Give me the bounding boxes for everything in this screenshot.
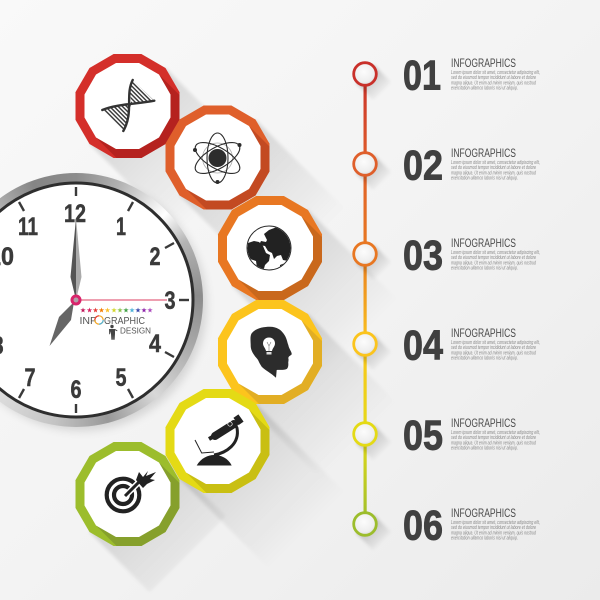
rainbow stars: ★	[80, 306, 86, 314]
body text: magna aliqua. Ut enim ad minim veniam, quis nostrud	[451, 260, 536, 266]
body text: Lorem ipsum dolor sit amet, consectetur adipiscing elit,	[451, 430, 540, 436]
badge 1: DNA	[76, 54, 180, 158]
timeline node 6	[354, 513, 391, 550]
timeline node 1	[354, 63, 391, 100]
number: 01	[403, 52, 441, 98]
step 02	[403, 142, 540, 188]
clock centre	[70, 294, 82, 306]
step 05	[403, 412, 540, 458]
number: 02	[403, 142, 443, 188]
step 06	[403, 502, 540, 548]
logo word: INF	[80, 316, 96, 327]
timeline node 4	[354, 333, 391, 370]
icon: head with light bulb	[250, 327, 292, 378]
logo person	[109, 325, 118, 340]
long shadows of the badges	[90, 68, 405, 592]
body text: sed do eiusmod tempor incididunt ut labore et dolore	[451, 435, 536, 441]
number: 03	[403, 232, 443, 278]
number: 06	[403, 502, 443, 548]
rainbow stars: ★	[92, 306, 99, 314]
body text: magna aliqua. Ut enim ad minim veniam, quis nostrud	[451, 170, 536, 176]
logo: infographic design	[80, 306, 153, 340]
icon: DNA helix	[102, 80, 154, 131]
logo ring	[95, 316, 103, 324]
timeline node 3	[354, 243, 391, 280]
timeline	[354, 63, 391, 550]
body text	[451, 70, 540, 92]
clock numerals: 1	[116, 213, 126, 241]
body text: sed do eiusmod tempor incididunt ut labore et dolore	[451, 345, 536, 351]
body text: exercitation ullamco laboris nisi ut aliquip.	[451, 356, 518, 362]
badge 4: head	[218, 300, 322, 404]
icon: microscope	[195, 418, 241, 466]
clock	[0, 173, 206, 430]
clock numerals: 2	[150, 243, 160, 271]
badge 3: globe	[218, 196, 322, 300]
rainbow stars: ★	[104, 306, 111, 314]
heading: INFOGRAPHICS	[451, 146, 516, 160]
rainbow stars	[80, 306, 153, 314]
badge 6: target	[76, 442, 180, 546]
minute hand	[70, 218, 82, 300]
step 01	[403, 52, 540, 98]
clock metal rim	[0, 173, 203, 427]
rainbow stars: ★	[147, 306, 153, 314]
rainbow stars: ★	[123, 306, 129, 314]
body text: exercitation ullamco laboris nisi ut aliquip.	[451, 536, 518, 542]
icon: atom	[191, 133, 244, 184]
second hand	[76, 299, 167, 301]
body text	[451, 340, 540, 362]
clock numerals: 12	[64, 200, 86, 228]
badge 2: atom	[166, 106, 270, 210]
body text: sed do eiusmod tempor incididunt ut labore et dolore	[451, 75, 536, 81]
rainbow stars: ★	[117, 306, 123, 314]
body text: Lorem ipsum dolor sit amet, consectetur adipiscing elit,	[451, 160, 540, 166]
rainbow stars: ★	[86, 306, 93, 314]
timeline line	[364, 74, 367, 524]
body text: Lorem ipsum dolor sit amet, consectetur adipiscing elit,	[451, 340, 540, 346]
clock ticks	[19, 187, 189, 413]
step 04	[403, 322, 540, 368]
clock numerals: 3	[164, 287, 176, 315]
body text: Lorem ipsum dolor sit amet, consectetur adipiscing elit,	[451, 250, 540, 256]
rainbow stars: ★	[141, 306, 147, 314]
clock numerals: 7	[24, 364, 36, 392]
clock numerals: 4	[149, 330, 161, 358]
clock face	[0, 183, 193, 417]
heading: INFOGRAPHICS	[451, 236, 516, 250]
body text: magna aliqua. Ut enim ad minim veniam, quis nostrud	[451, 80, 536, 86]
body text: sed do eiusmod tempor incididunt ut labore et dolore	[451, 255, 536, 261]
clock numerals: 6	[70, 376, 82, 404]
icon: globe	[247, 226, 293, 274]
body text: magna aliqua. Ut enim ad minim veniam, quis nostrud	[451, 530, 536, 536]
rainbow stars: ★	[98, 306, 105, 314]
clock numerals: 5	[116, 364, 127, 392]
hour hand	[50, 302, 74, 346]
logo word: DESIGN	[120, 326, 151, 336]
heading: INFOGRAPHICS	[451, 56, 516, 70]
rainbow stars: ★	[111, 306, 117, 314]
timeline node 2	[354, 153, 391, 190]
badge 5: microscope	[166, 389, 270, 493]
body text: sed do eiusmod tempor incididunt ut labore et dolore	[451, 525, 536, 531]
body text	[451, 430, 540, 452]
body text: exercitation ullamco laboris nisi ut aliquip.	[451, 86, 518, 92]
body text: exercitation ullamco laboris nisi ut aliquip.	[451, 446, 518, 452]
clock numerals: 11	[18, 213, 38, 241]
logo word: GRAPHIC	[104, 316, 145, 327]
step 03	[403, 232, 540, 278]
body text: Lorem ipsum dolor sit amet, consectetur adipiscing elit,	[451, 70, 540, 76]
body text: exercitation ullamco laboris nisi ut aliquip.	[451, 266, 518, 272]
body text: exercitation ullamco laboris nisi ut aliquip.	[451, 176, 518, 182]
body text: magna aliqua. Ut enim ad minim veniam, quis nostrud	[451, 440, 536, 446]
body text	[451, 250, 540, 272]
heading: INFOGRAPHICS	[451, 326, 516, 340]
rainbow stars: ★	[135, 306, 141, 314]
heading: INFOGRAPHICS	[451, 416, 516, 430]
body text: magna aliqua. Ut enim ad minim veniam, quis nostrud	[451, 350, 536, 356]
number: 04	[403, 322, 444, 368]
rainbow stars: ★	[129, 306, 135, 314]
icon: target with arrow	[107, 471, 156, 511]
body text: Lorem ipsum dolor sit amet, consectetur adipiscing elit,	[451, 520, 540, 526]
clock numerals	[0, 200, 176, 404]
body text: sed do eiusmod tempor incididunt ut labore et dolore	[451, 165, 536, 171]
body text	[451, 520, 540, 542]
clock shadow	[0, 180, 206, 430]
number: 05	[403, 412, 443, 458]
timeline node 5	[354, 423, 391, 460]
body text	[451, 160, 540, 182]
heading: INFOGRAPHICS	[451, 506, 516, 520]
